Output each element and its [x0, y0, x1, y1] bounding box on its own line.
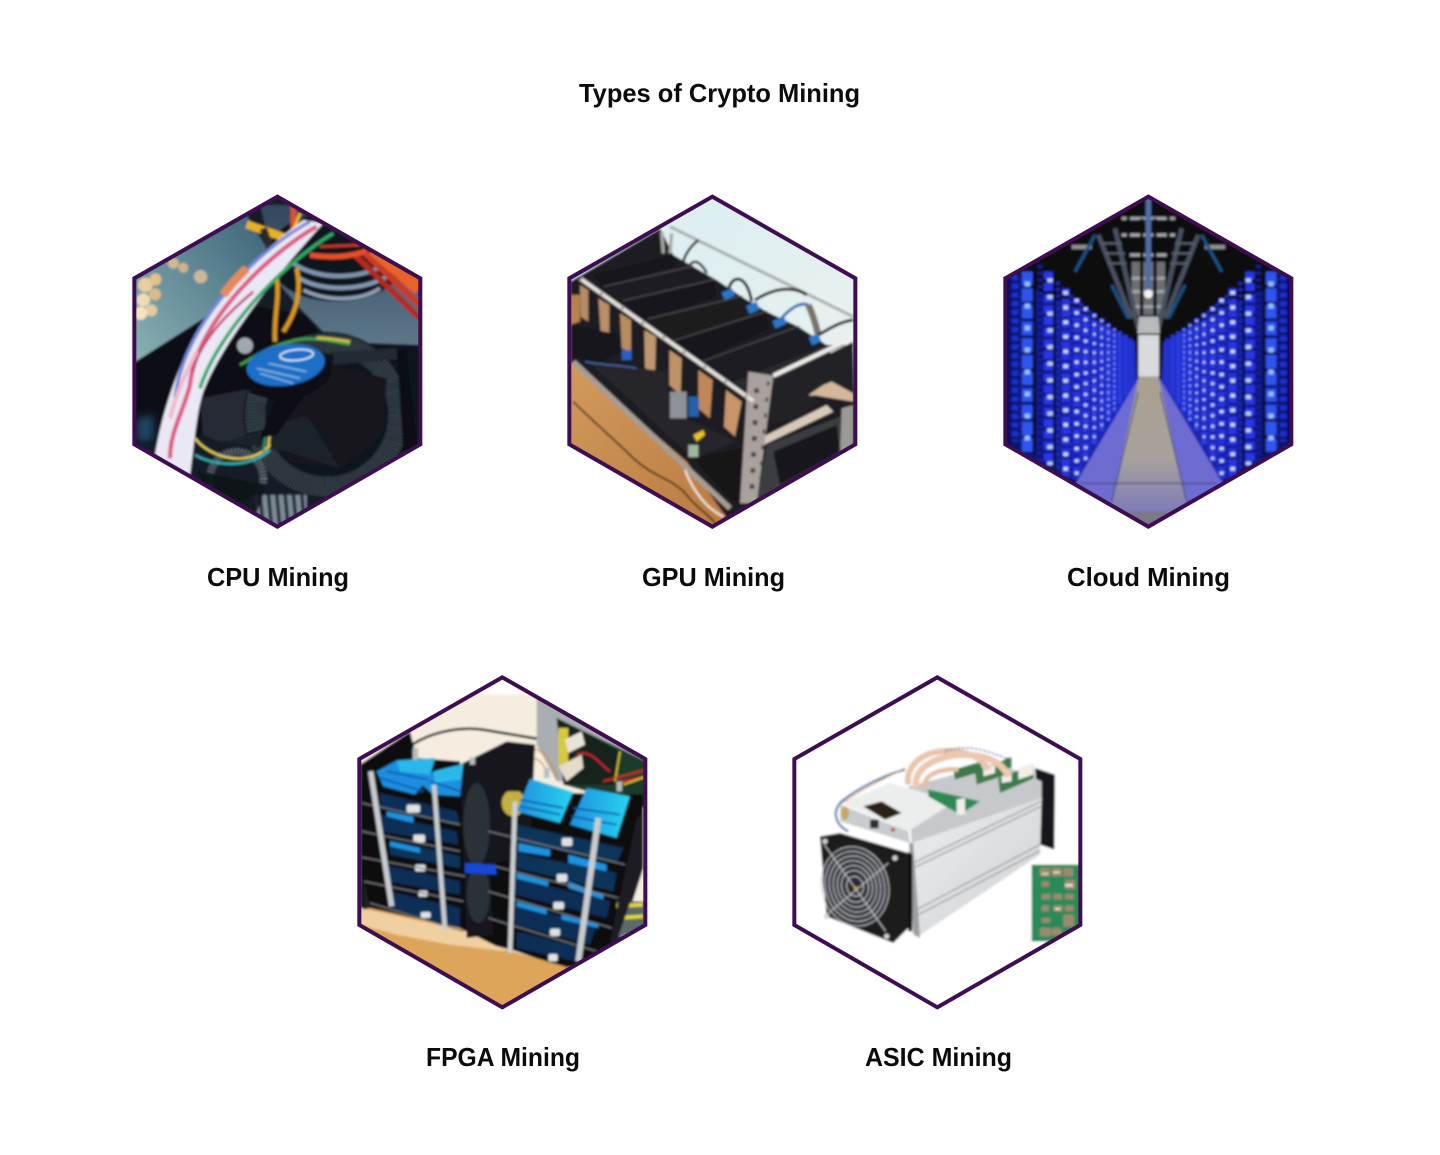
label: GPU Mining: GPU Mining: [642, 562, 785, 592]
panel: GPU mining: [567, 192, 860, 592]
label: CPU Mining: CPU Mining: [207, 562, 349, 592]
panel: CPU mining: [130, 192, 427, 592]
hexagon photo: data-centre aisle: [1002, 192, 1295, 532]
label: FPGA Mining: FPGA Mining: [426, 1042, 580, 1072]
hexagon photo: FPGA boards: [357, 675, 650, 1011]
hexagon photo: GPU rig: [567, 192, 860, 532]
title: Types of Crypto Mining: [579, 78, 860, 108]
panel: FPGA mining: [357, 675, 650, 1072]
label: ASIC Mining: ASIC Mining: [865, 1042, 1012, 1072]
label: Cloud Mining: Cloud Mining: [1067, 562, 1230, 592]
hexagon photo: CPU cooler: [130, 192, 427, 532]
hexagon photo: ASIC miner: [792, 675, 1085, 1011]
panel: Cloud mining: [1002, 192, 1295, 592]
panel: ASIC mining: [792, 675, 1085, 1072]
wire bundle: [155, 220, 323, 475]
infographic canvas: [132, 83, 1294, 1072]
